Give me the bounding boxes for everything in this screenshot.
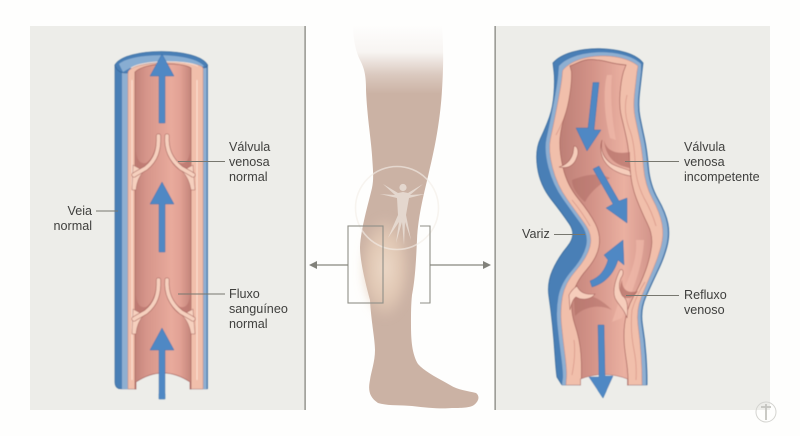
valve: top-right leaflet [601,140,631,176]
valve 1 [132,136,195,190]
valve: bottom-left leaflet [569,286,595,310]
lumen highlight [605,75,644,322]
label: Válvula venosa incompetente [625,140,760,184]
label: Variz: Variz [522,227,550,241]
label: Veia normal: Veia [67,204,92,218]
label: Fluxo sanguíneo normal: sanguíneo [229,302,288,316]
arrow: downward exit [589,325,613,398]
outer blue wall [115,57,208,389]
lumen [560,59,652,385]
arrow: downward reflux top [576,82,601,151]
callout: zoom rectangle on leg [348,226,383,303]
illustration: leg silhouette [353,25,478,408]
lumen [135,64,191,389]
pink wall [128,63,203,389]
illustration: normal vein [115,52,210,399]
pink wall [550,56,663,385]
arrow: upward flow middle [150,182,174,252]
right panel divider [494,26,496,410]
light blue wall bands [122,68,206,389]
arrow: upward flow bottom [150,328,174,399]
label: Válvula venosa normal: normal [229,170,268,184]
label: Veia normal [54,204,118,233]
label: Válvula venosa incompetente: Válvula [684,140,725,154]
valve 2 [132,280,195,334]
label: Válvula venosa incompetente: incompetente [684,170,760,184]
icon: corner logo [756,402,776,422]
valve: top-left leaflet [559,146,578,168]
label: Válvula venosa incompetente: venosa [684,155,725,169]
label: Fluxo sanguíneo normal: Fluxo [229,287,260,301]
top rim [115,52,208,73]
illustration: varicose vein [537,49,669,398]
arrow: pointing to varicose vein [430,261,491,269]
wall texture lines [556,95,656,380]
watermark: figure in a circle [356,166,438,250]
arrow: upward flow top [150,54,174,123]
label: Fluxo sanguíneo normal [178,287,288,331]
label: Fluxo sanguíneo normal: normal [229,317,268,331]
label: Refluxo venoso: venoso [684,303,725,317]
bottom opening [136,373,190,391]
outer dark blue wall [537,49,669,385]
lumen shadow patches [572,175,612,316]
arrow: pointing to normal vein [309,261,348,269]
label: Válvula venosa normal: venosa [229,155,270,169]
valve: bottom-right leaflet [614,270,628,318]
label: Refluxo venoso [626,288,727,317]
calf highlight [359,216,411,320]
light blue band [546,52,668,385]
label: Refluxo venoso: Refluxo [684,288,727,302]
left panel divider [304,26,306,410]
arrow: diagonal reflux [593,166,627,223]
panel: normal vein background [30,26,305,410]
bottom opening [580,374,628,388]
label: Válvula venosa normal [178,140,270,184]
label: Válvula venosa normal: Válvula [229,140,270,154]
label: Variz [522,227,585,241]
callout: right bracket on leg [420,226,430,303]
arrow: curved upward reflux [590,240,624,287]
label: Veia normal: normal [54,219,92,233]
panel: varicose vein background [495,26,770,410]
